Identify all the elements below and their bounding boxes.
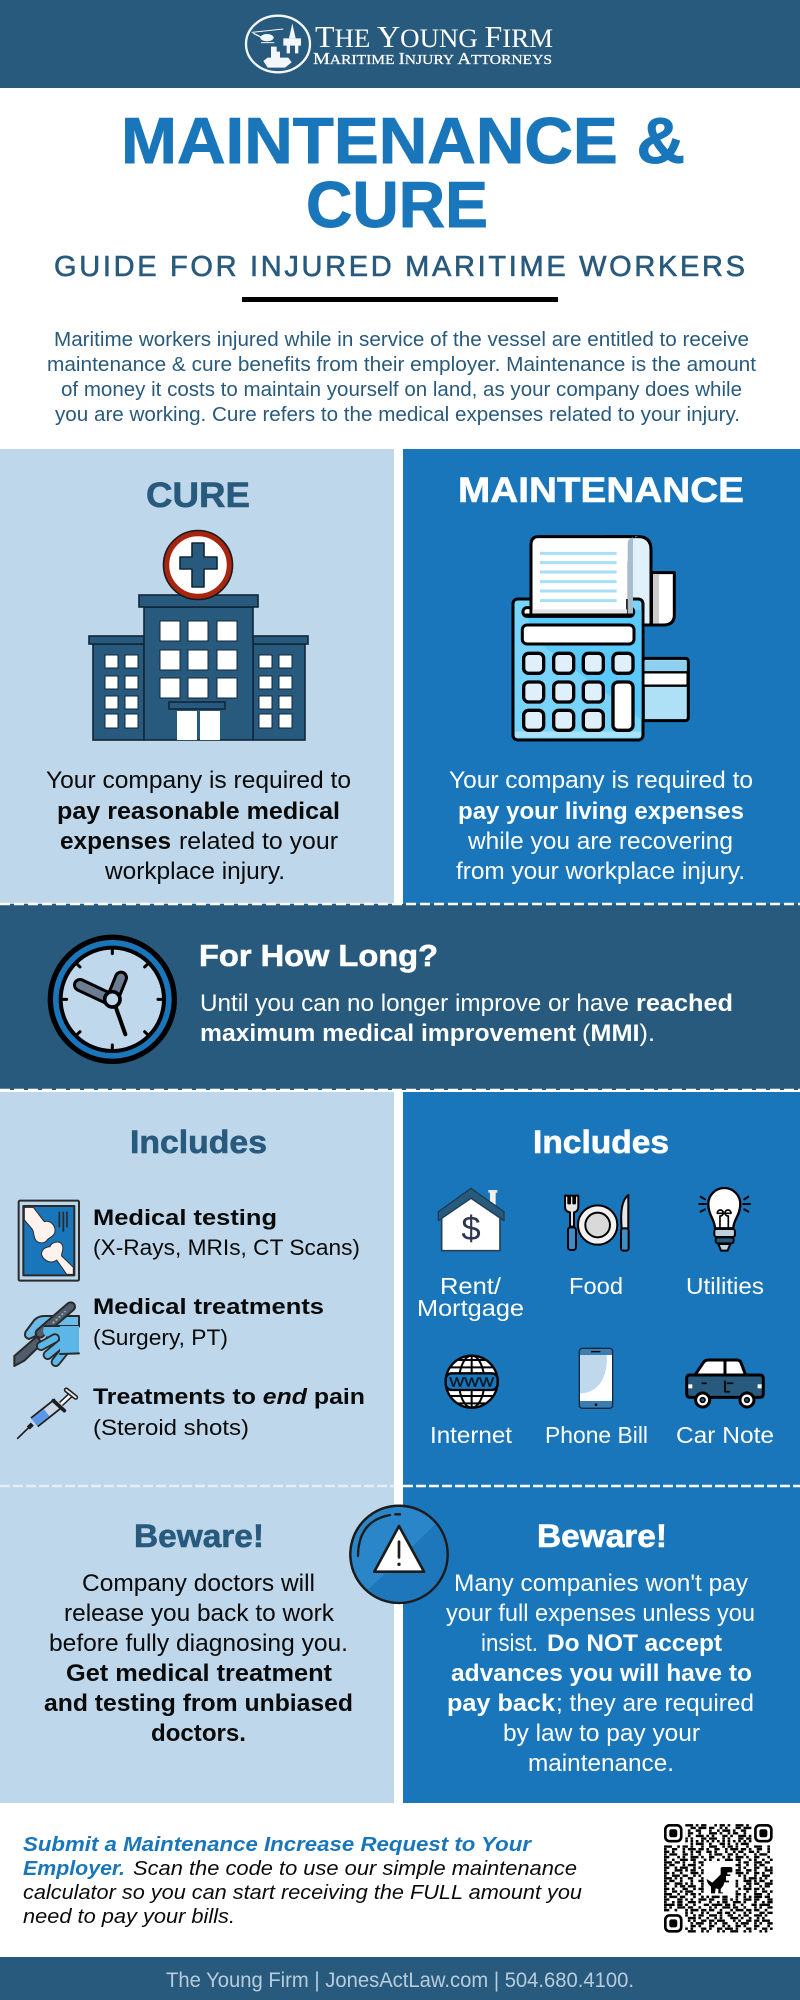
maintenance warning text: maintenance.: [528, 1750, 674, 1777]
icon: hospital: [89, 530, 308, 740]
for how long description: (MMI).: [582, 1020, 655, 1047]
callout: submit a maintenance increase request: need to pay your bills.: [23, 1906, 235, 1928]
panel: maintenance beware: [403, 1486, 800, 1803]
item: medical testing: (X-Rays, MRIs, CT Scans): [93, 1235, 360, 1260]
intro paragraph: of money it costs to maintain yourself on land, as your company does while: [61, 379, 742, 401]
intro paragraph: maintenance & cure benefits from their employer. Maintenance is the amount: [47, 354, 756, 376]
maintenance warning text: insist.: [481, 1630, 538, 1657]
title rule: [242, 297, 558, 302]
item: treatments to end pain: (Steroid shots): [93, 1415, 249, 1440]
icon: syringe: [18, 1390, 76, 1438]
icon: house: $: [461, 1210, 481, 1248]
panel: cure: [0, 449, 394, 904]
maintenance description: pay your living expenses: [458, 798, 744, 825]
label: rent mortgage: Mortgage: [417, 1295, 524, 1321]
intro paragraph: Maritime workers injured while in service of the vessel are entitled to receive: [54, 329, 749, 351]
for how long description: Until you can no longer improve or have: [200, 990, 629, 1017]
label: utilities: Utilities: [686, 1273, 764, 1299]
callout: submit a maintenance increase request: Submit a Maintenance Increase Request to Your: [23, 1834, 532, 1856]
heading: for how long: For How Long?: [199, 938, 438, 973]
callout: submit a maintenance increase request: Scan the code to use our simple maintenance: [133, 1858, 577, 1880]
icon: phone: [579, 1348, 613, 1408]
item: medical treatments: Medical treatments: [93, 1294, 324, 1319]
maintenance description: from your workplace injury.: [456, 858, 745, 885]
icon: plate and cutlery: [565, 1195, 629, 1251]
icon: scalpel and glove: [14, 1307, 79, 1366]
intro paragraph: [47, 329, 756, 426]
callout: submit a maintenance increase request: [23, 1834, 582, 1928]
maintenance description: while you are recovering: [467, 828, 733, 855]
cure description: [46, 767, 351, 885]
maintenance description: Your company is required to: [449, 767, 753, 794]
label: car note: Car Note: [676, 1422, 774, 1448]
title: CURE: [306, 168, 488, 241]
intro paragraph: you are working. Cure refers to the medical expenses related to your injury.: [55, 404, 740, 426]
item: medical treatments: [93, 1294, 324, 1350]
item: medical testing: [93, 1205, 360, 1260]
item: medical treatments: (Surgery, PT): [93, 1325, 228, 1350]
heading: includes (maintenance): Includes: [533, 1124, 669, 1160]
panel: maintenance: [403, 449, 800, 904]
icon: calculator with receipt: [513, 537, 688, 740]
cure warning text: doctors.: [151, 1720, 246, 1747]
footer contact line: The Young Firm | JonesActLaw.com | 504.680.4100.: [166, 1969, 634, 1992]
cure description: related to your: [179, 828, 338, 855]
heading: beware (maintenance): Beware!: [537, 1518, 667, 1554]
title: MAINTENANCE &: [121, 104, 685, 177]
cure description: Your company is required to: [46, 767, 351, 794]
maintenance warning text: [446, 1570, 755, 1777]
maintenance warning text: your full expenses unless you: [446, 1600, 755, 1627]
for how long description: reached: [636, 990, 733, 1017]
icon: house: [438, 1188, 504, 1251]
cure warning text: before fully diagnosing you.: [49, 1630, 348, 1657]
icon: globe: [446, 1356, 498, 1408]
callout: submit a maintenance increase request: calculator so you can start receiving the FULL amount you: [23, 1882, 582, 1904]
QR code: [661, 1821, 775, 1935]
heading: beware (cure): Beware!: [134, 1518, 264, 1554]
heading: cure: CURE: [146, 476, 250, 515]
icon: car: [687, 1360, 763, 1407]
cure description: pay reasonable medical: [57, 798, 340, 825]
label: internet: Internet: [430, 1422, 513, 1448]
for how long description: [200, 990, 733, 1047]
maintenance warning text: advances you will have to: [451, 1660, 752, 1687]
item: medical testing: Medical testing: [93, 1205, 277, 1230]
panel: cure includes: [0, 1092, 394, 1486]
cure description: expenses: [60, 828, 171, 855]
firm name: THE YOUNG FIRM: [315, 19, 553, 54]
maintenance warning text: Many companies won't pay: [454, 1570, 748, 1597]
callout: submit a maintenance increase request: Employer.: [23, 1858, 125, 1880]
cure warning text: Get medical treatment: [66, 1660, 332, 1687]
panel: maintenance includes: [403, 1092, 800, 1486]
cure warning text: [44, 1570, 353, 1747]
maintenance description: [449, 767, 753, 885]
icon: globe: WWW: [449, 1374, 494, 1389]
maintenance warning text: by law to pay your: [503, 1720, 700, 1747]
footer: [0, 1957, 800, 2000]
label: phone bill: Phone Bill: [545, 1422, 648, 1448]
subtitle: GUIDE FOR INJURED MARITIME WORKERS: [54, 251, 745, 283]
maintenance warning text: Do NOT accept: [547, 1630, 722, 1657]
maintenance warning text: ; they are required: [556, 1690, 754, 1717]
icon: dinosaur in QR code: [707, 1867, 732, 1893]
for how long description: maximum medical improvement: [200, 1020, 576, 1047]
title: [121, 104, 685, 241]
icon: x-ray: [19, 1201, 79, 1281]
heading: includes (cure): Includes: [130, 1124, 267, 1160]
label: rent mortgage: [417, 1273, 524, 1321]
panel: cure beware: [0, 1486, 394, 1803]
cure description: workplace injury.: [104, 858, 285, 885]
cure warning text: Company doctors will: [82, 1570, 315, 1597]
firm tagline: MARITIME INJURY ATTORNEYS: [313, 49, 552, 68]
heading: maintenance: MAINTENANCE: [458, 471, 744, 510]
maintenance warning text: pay back: [447, 1690, 556, 1717]
item: treatments to end pain: Treatments to end pain: [93, 1384, 365, 1409]
cure warning text: release you back to work: [64, 1600, 335, 1627]
label: food: Food: [569, 1273, 623, 1299]
item: treatments to end pain: [93, 1384, 365, 1440]
icon: clock: [50, 937, 174, 1061]
icon: warning badge: [350, 1506, 448, 1603]
cure warning text: and testing from unbiased: [44, 1690, 353, 1717]
icon: light bulb: [699, 1188, 750, 1251]
icon: firm logo: [246, 16, 310, 72]
label: rent mortgage: Rent/: [440, 1273, 502, 1299]
panel: for how long: [0, 904, 800, 1090]
header banner: [0, 0, 800, 88]
